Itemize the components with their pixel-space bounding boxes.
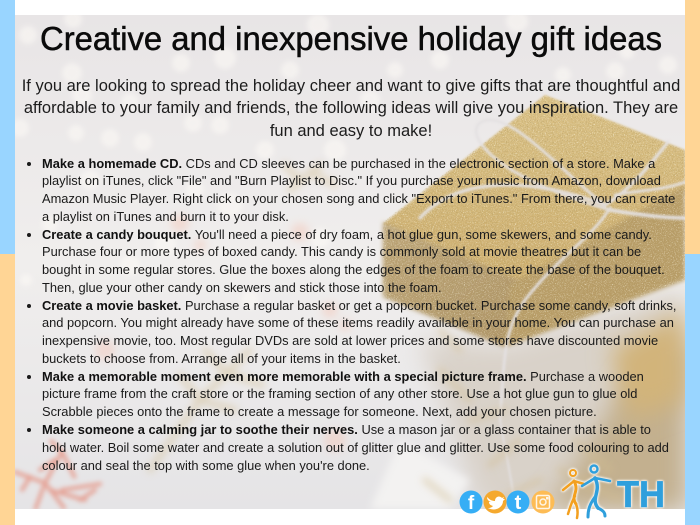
intro paragraph: fun and easy to make! (270, 122, 432, 140)
gift ideas list (27, 156, 677, 473)
title: Creative and inexpensive holiday gift ideas (40, 20, 662, 57)
gift ideas list: and popcorn. You might already have some of these items readily available in your home. You can purchase an (42, 315, 674, 330)
logo letters: TH (617, 474, 665, 515)
red snowflake (15, 440, 100, 510)
gift ideas list: Then, glue your other candy on skewers and stick those into the foam. (42, 280, 442, 295)
icon: twitter (484, 490, 506, 514)
lower gift box side (420, 290, 685, 509)
right side bar (685, 0, 700, 525)
intro paragraph: affordable to your family and friends, the following ideas will give you inspiration. They are (24, 99, 678, 117)
gold sprigs (150, 165, 620, 500)
bokeh lights (11, 10, 677, 309)
social icons (460, 490, 554, 514)
gift ideas list: picture frame from the craft store or the framing section of any other store. Use a hot glue gun to glue old (42, 386, 637, 401)
gift ideas list: Make someone a calming jar to soothe their nerves. Use a mason jar or a glass container that is able to (42, 422, 651, 437)
icon: blue figure (582, 466, 610, 517)
gift ideas list: Amazon Music Player. Right click on your chosen song and click "Export to iTunes." From there, you can create (42, 191, 675, 206)
icon: tumblr: t (515, 492, 522, 514)
gift ideas list: Make a memorable moment even more memorable with a special picture frame. Purchase a wooden (42, 369, 644, 384)
logo: TH figures (560, 462, 665, 520)
gift ideas list: Scrabble pieces onto the frame to create a message for someone. Next, add your chosen picture. (42, 404, 597, 419)
gift ideas list: bought in some regular stores. Glue the boxes along the edges of the foam to create the base of the bouquet. (42, 262, 665, 277)
gift ideas list: inexpensive movie, too. Most regular DVDs are sold at lower prices and some stores have discounted movie (42, 333, 658, 348)
gift ideas list: a playlist on iTunes and burn it to your disk. (42, 209, 289, 224)
gift ideas list: Create a movie basket. Purchase a regular basket or get a popcorn bucket. Purchase some candy, soft drinks, (42, 298, 677, 313)
gift top (380, 95, 685, 355)
white lower left of box (370, 440, 470, 509)
gift ideas list: hold water. Boil some water and create a solution out of glitter glue and glitter. Use some food colouring to add (42, 440, 669, 455)
gift ideas list: Make a homemade CD. CDs and CD sleeves can be purchased in the electronic section of a store. Make a (42, 156, 655, 170)
gift ideas list: colour and seal the top with some glue when you're done. (42, 458, 370, 473)
intro paragraph: If you are looking to spread the holiday cheer and want to give gifts that are thoughtful and (22, 77, 680, 95)
icon: instagram (532, 490, 554, 514)
left side bar (0, 0, 15, 525)
gift ideas list: buckets to choose from. Arrange all of your items in the basket. (42, 351, 401, 366)
gift ideas list: playlist on iTunes, click "File" and "Burn Playlist to Disc." If you purchase your music from Amazon, download (42, 173, 661, 188)
pink bokeh (95, 214, 351, 451)
intro paragraph (22, 77, 680, 140)
gift ideas list: Create a candy bouquet. You'll need a piece of dry foam, a hot glue gun, some skewers, and some candy. (42, 227, 652, 242)
icon: orange figure (563, 470, 584, 518)
icon: facebook: f (468, 493, 475, 514)
gift ideas list: Purchase four or more types of boxed candy. This candy is commonly sold at movie theatres but it can be (42, 244, 641, 259)
ribbon (420, 120, 685, 505)
